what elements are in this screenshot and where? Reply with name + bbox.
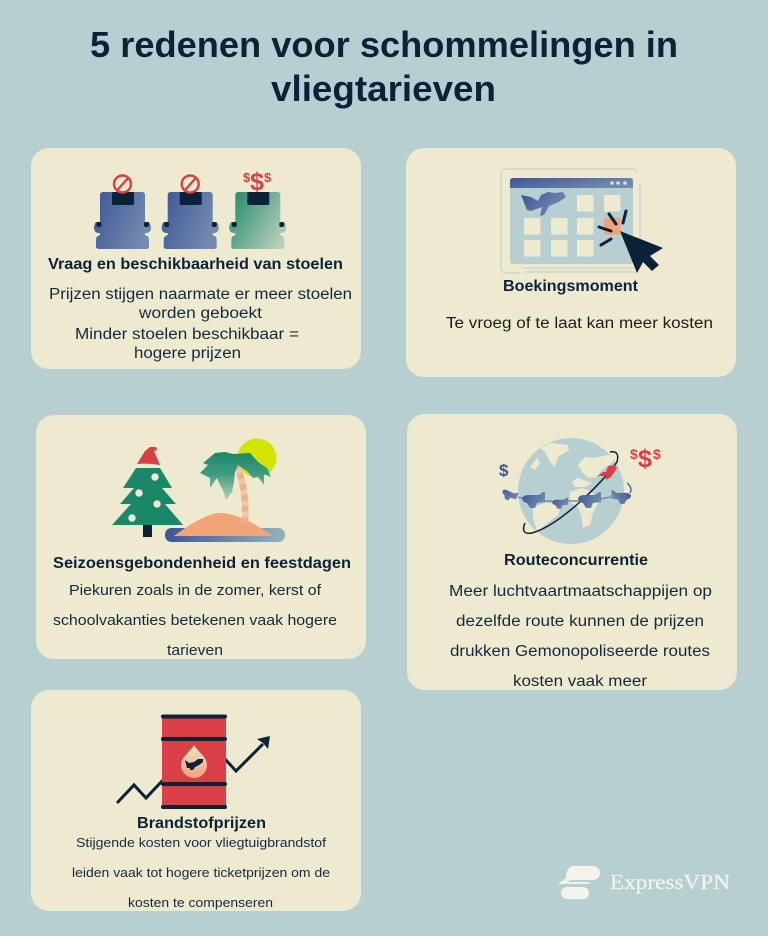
wordmark: ExpressVPN (610, 870, 730, 894)
icon: airplane seats with price signs: $ (264, 170, 272, 185)
text block: Piekuren zoals in de zomer, kerst of (69, 583, 322, 599)
icon: logo mark (558, 866, 600, 899)
panel: routeconcurrentie (407, 414, 737, 690)
title: 5 redenen voor schommelingen in (90, 24, 678, 65)
text block: kosten te compenseren (128, 895, 273, 910)
text block: Meer luchtvaartmaatschappijen op (449, 583, 712, 600)
text block (72, 835, 330, 910)
panel: seizoensgebondenheid (36, 415, 366, 659)
heading: Boekingsmoment (503, 278, 638, 295)
text block: Stijgende kosten voor vliegtuigbrandstof (76, 835, 326, 850)
title: vliegtarieven (271, 68, 496, 109)
text block: dezelfde route kunnen de prijzen (456, 613, 704, 630)
text block: Prijzen stijgen naarmate er meer stoelen (49, 286, 352, 303)
heading: Vraag en beschikbaarheid van stoelen (48, 256, 343, 273)
icon: globe with flight route: $ (653, 446, 661, 462)
heading: Seizoensgebondenheid en feestdagen (53, 555, 351, 572)
text block: Minder stoelen beschikbaar = (75, 326, 299, 343)
text block: schoolvakanties betekenen vaak hogere (53, 613, 337, 629)
text block (49, 286, 352, 362)
icon: globe with flight route: $ (638, 445, 652, 473)
panel: vraag en beschikbaarheid (31, 148, 361, 369)
text block: drukken Gemonopoliseerde routes (450, 643, 710, 660)
icon: fuel barrel with rising chart (117, 714, 270, 809)
text block: worden geboekt (138, 305, 263, 322)
logo: ExpressVPN (558, 866, 730, 899)
icon: globe with flight route: $ (499, 461, 509, 480)
heading: Brandstofprijzen (137, 815, 266, 832)
heading: Routeconcurrentie (504, 552, 648, 569)
text block (449, 583, 712, 690)
text block (53, 583, 337, 659)
icon: booking calendar with cursor (501, 169, 663, 273)
text block: tarieven (167, 643, 223, 659)
panel: brandstofprijzen (31, 690, 361, 911)
text block: Te vroeg of te laat kan meer kosten (446, 315, 713, 332)
text block: hogere prijzen (134, 345, 241, 362)
icon: globe with flight route: $ (630, 446, 638, 462)
icon: airplane seats with price signs: $ (243, 170, 251, 185)
text block: kosten vaak meer (513, 673, 647, 690)
icon: airplane seats with price signs (94, 168, 286, 249)
title (90, 24, 678, 109)
icon: airplane seats with price signs: $ (250, 168, 264, 196)
panel: boekingsmoment (406, 148, 736, 377)
icon: globe with flight route (499, 438, 661, 544)
text block: leiden vaak tot hogere ticketprijzen om de (72, 865, 330, 880)
icon: christmas tree and palm island (112, 438, 285, 542)
